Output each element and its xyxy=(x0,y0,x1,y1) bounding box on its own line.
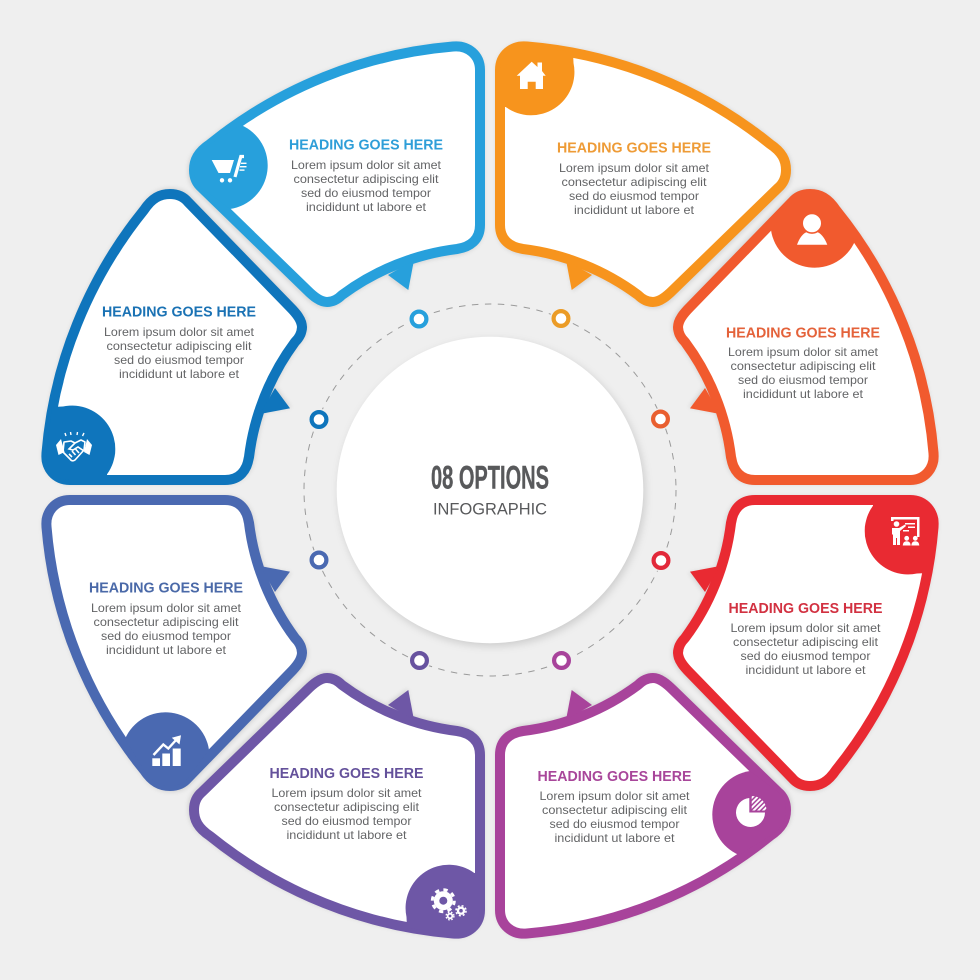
text: vermilion: sed do eiusmod tempor xyxy=(738,373,868,387)
text: orange: sed do eiusmod tempor xyxy=(569,189,699,203)
text: cyan: consectetur adipiscing elit xyxy=(294,172,439,186)
panel: orange top-right xyxy=(500,46,786,302)
panel: red right-bottom xyxy=(678,500,934,786)
text: blue: incididunt ut labore et xyxy=(119,367,240,381)
marker: purple xyxy=(408,650,430,672)
slate blue outline xyxy=(46,500,302,786)
text: cyan: sed do eiusmod tempor xyxy=(301,186,431,200)
text: orange xyxy=(557,141,711,217)
text: red xyxy=(728,601,882,677)
text: purple: Lorem ipsum dolor sit amet xyxy=(272,786,422,800)
text: blue: HEADING GOES HERE xyxy=(102,304,256,320)
text: magenta: Lorem ipsum dolor sit amet xyxy=(540,789,690,803)
text: slate blue: sed do eiusmod tempor xyxy=(101,629,231,643)
text: cyan: HEADING GOES HERE xyxy=(289,138,443,154)
text: blue xyxy=(102,304,256,381)
vermilion outline xyxy=(678,194,934,480)
text: orange: Lorem ipsum dolor sit amet xyxy=(559,161,710,175)
text: vermilion xyxy=(726,326,880,401)
text: orange: consectetur adipiscing elit xyxy=(562,175,707,189)
text: purple: sed do eiusmod tempor xyxy=(282,814,412,828)
text: red: HEADING GOES HERE xyxy=(728,601,882,617)
text: slate blue: Lorem ipsum dolor sit amet xyxy=(91,601,242,615)
text: vermilion: Lorem ipsum dolor sit amet xyxy=(728,345,879,359)
text: magenta: incididunt ut labore et xyxy=(554,831,675,845)
panel: purple bottom-left xyxy=(194,678,480,934)
text: magenta: consectetur adipiscing elit xyxy=(542,803,688,817)
dashed connector ring xyxy=(304,304,676,676)
icon: pie chart xyxy=(736,796,766,827)
blue outline xyxy=(46,194,302,480)
text: cyan: Lorem ipsum dolor sit amet xyxy=(291,158,442,172)
panel: blue left-top xyxy=(46,194,302,480)
text: blue: sed do eiusmod tempor xyxy=(114,353,244,367)
marker: blue xyxy=(308,408,330,430)
text: red: sed do eiusmod tempor xyxy=(740,649,870,663)
text: purple: incididunt ut labore et xyxy=(286,828,407,842)
marker: red xyxy=(650,550,672,572)
text: red: incididunt ut labore et xyxy=(746,663,866,677)
icon: person xyxy=(797,214,827,245)
text: red: consectetur adipiscing elit xyxy=(733,635,879,649)
red outline xyxy=(678,500,934,786)
icon: house xyxy=(517,62,546,89)
icon: growth chart xyxy=(152,735,181,766)
marker: cyan xyxy=(408,308,430,330)
text: vermilion: consectetur adipiscing elit xyxy=(730,359,876,373)
marker: orange xyxy=(550,308,572,330)
text: slate blue: HEADING GOES HERE xyxy=(89,580,243,596)
marker: vermilion xyxy=(650,408,672,430)
icon: handshake xyxy=(56,432,92,461)
magenta outline xyxy=(500,678,786,934)
text: slate blue xyxy=(89,580,243,657)
text: vermilion: incididunt ut labore et xyxy=(743,387,864,401)
text: orange: HEADING GOES HERE xyxy=(557,141,711,157)
icon: shopping cart xyxy=(212,156,246,182)
title: 08 OPTIONS xyxy=(431,459,549,495)
text: magenta xyxy=(538,769,692,845)
text: blue: consectetur adipiscing elit xyxy=(106,339,252,353)
orange outline xyxy=(500,46,786,302)
icon: teacher at board xyxy=(891,517,920,546)
text: slate blue: incididunt ut labore et xyxy=(106,643,227,657)
purple outline xyxy=(194,678,480,934)
text: cyan: incididunt ut labore et xyxy=(306,200,427,214)
text: purple: HEADING GOES HERE xyxy=(270,766,424,782)
text: slate blue: consectetur adipiscing elit xyxy=(94,615,239,629)
text: purple xyxy=(270,766,424,842)
panel: vermilion right-top xyxy=(678,194,934,480)
icon: gears xyxy=(432,890,466,920)
marker: slate blue xyxy=(308,549,330,571)
text: cyan xyxy=(289,138,443,214)
text: vermilion: HEADING GOES HERE xyxy=(726,326,880,342)
subtitle: INFOGRAPHIC xyxy=(433,500,547,518)
text: red: Lorem ipsum dolor sit amet xyxy=(730,621,881,635)
ring markers xyxy=(308,308,672,672)
text: purple: consectetur adipiscing elit xyxy=(274,800,420,814)
panel: slate blue left-bottom xyxy=(46,500,302,786)
text: blue: Lorem ipsum dolor sit amet xyxy=(104,325,255,339)
text: magenta: HEADING GOES HERE xyxy=(538,769,692,785)
marker: magenta xyxy=(550,650,572,672)
text: orange: incididunt ut labore et xyxy=(574,203,695,217)
center circle xyxy=(337,337,643,643)
panel: magenta bottom-right xyxy=(500,678,786,934)
panel: cyan top-left xyxy=(194,46,480,302)
text: magenta: sed do eiusmod tempor xyxy=(550,817,680,831)
cyan outline xyxy=(194,46,480,302)
